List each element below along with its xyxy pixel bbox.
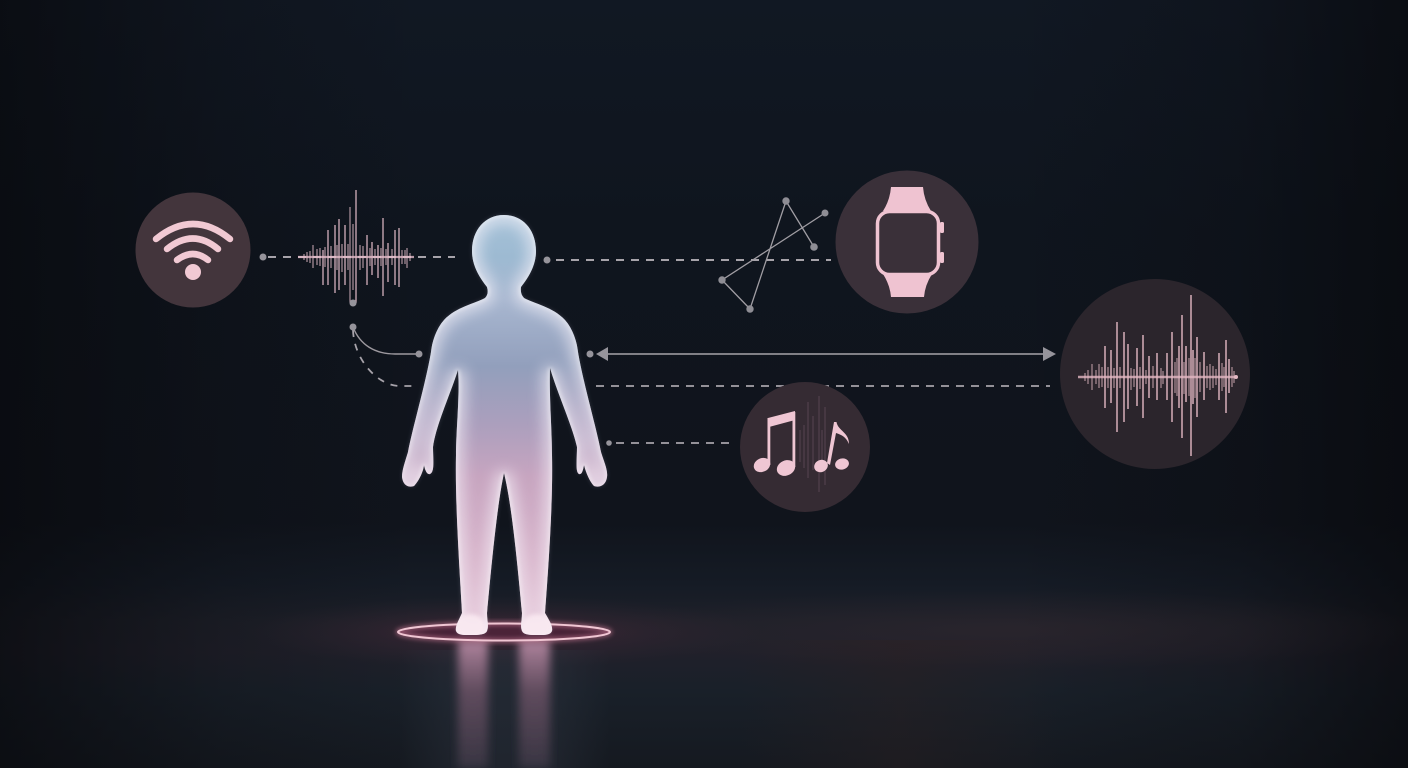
icon: large waveform badge <box>1060 279 1250 469</box>
floor glow <box>244 596 764 668</box>
icon: smartwatch badge <box>836 170 978 314</box>
connector: wifi to waveform to figure <box>260 254 455 260</box>
node: waveform lower dot <box>350 300 356 306</box>
icon: wifi badge <box>136 192 250 308</box>
network graph <box>718 197 828 313</box>
icon: music badge <box>740 382 870 512</box>
human figure <box>402 215 607 638</box>
double-headed arrow <box>586 347 1056 361</box>
connector: figure to watch <box>544 256 831 264</box>
connector: curved lines to figure <box>350 324 422 386</box>
small waveform <box>298 190 414 303</box>
connector: figure to music <box>606 440 735 446</box>
figure reflection <box>400 640 610 768</box>
pedestal ring <box>398 624 610 640</box>
connector: dashed line to large waveform <box>596 385 1050 387</box>
